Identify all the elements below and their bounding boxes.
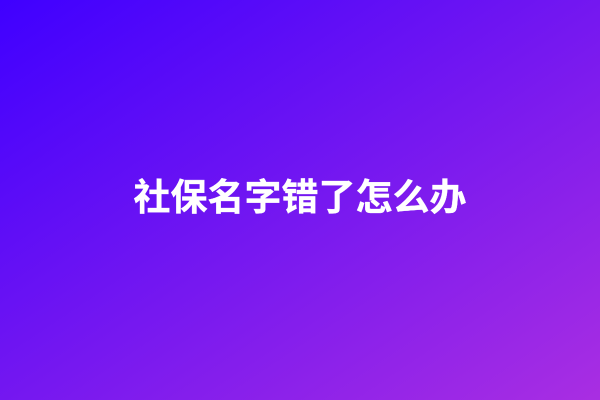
title: 社保名字错了怎么办 bbox=[134, 177, 466, 218]
